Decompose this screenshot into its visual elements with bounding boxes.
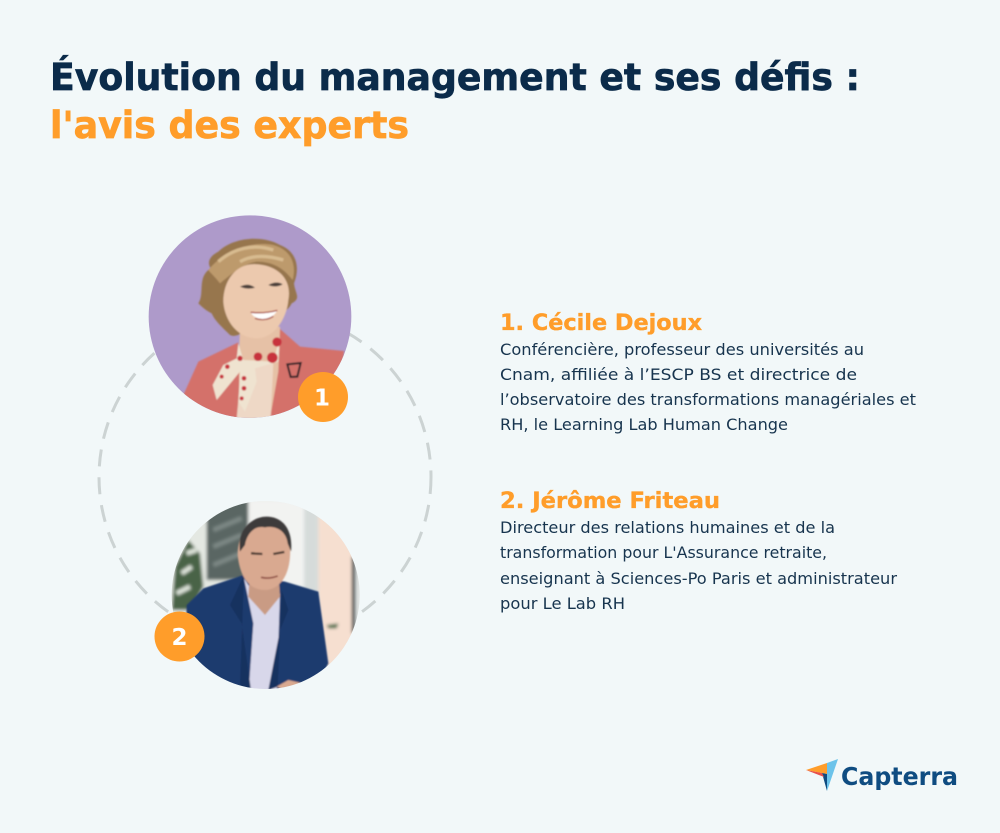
portrait: Jérôme Friteau [168,500,362,697]
expert 2 description: transformation pour L'Assurance retraite, [500,543,827,562]
badge 2: 2 [171,625,188,651]
expert 2 text block [500,489,897,613]
wordmark: Capterra [841,762,958,791]
Capterra logo [806,759,958,791]
expert 2 description [500,518,897,613]
expert 1 description: Cnam, affiliée à l’ESCP BS et directrice de [500,365,857,384]
expert 2 description: Directeur des relations humaines et de la [500,518,835,537]
dashed connector ring [99,311,431,643]
expert 2 description: enseignant à Sciences-Po Paris et administrateur [500,569,897,588]
badge 1 [298,372,348,422]
expert 1 description: l’observatoire des transformations managériales et [500,390,916,409]
expert 1 description [500,340,916,434]
badge 2 [154,612,204,662]
expert 2 description: pour Le Lab RH [500,594,625,613]
expert 1 text block [500,311,916,434]
expert 1 description: RH, le Learning Lab Human Change [500,415,788,434]
expert 2 name: 2. Jérôme Friteau [500,489,720,514]
title: l'avis des experts [50,103,409,147]
expert 1 name: 1. Cécile Dejoux [500,311,702,336]
portrait: Cécile Dejoux [149,215,351,418]
badge 1: 1 [314,386,330,412]
title [50,55,860,147]
title: Évolution du management et ses défis : [50,55,860,99]
expert 1 description: Conférencière, professeur des universités au [500,340,864,359]
icon: Capterra arrow [806,759,838,791]
